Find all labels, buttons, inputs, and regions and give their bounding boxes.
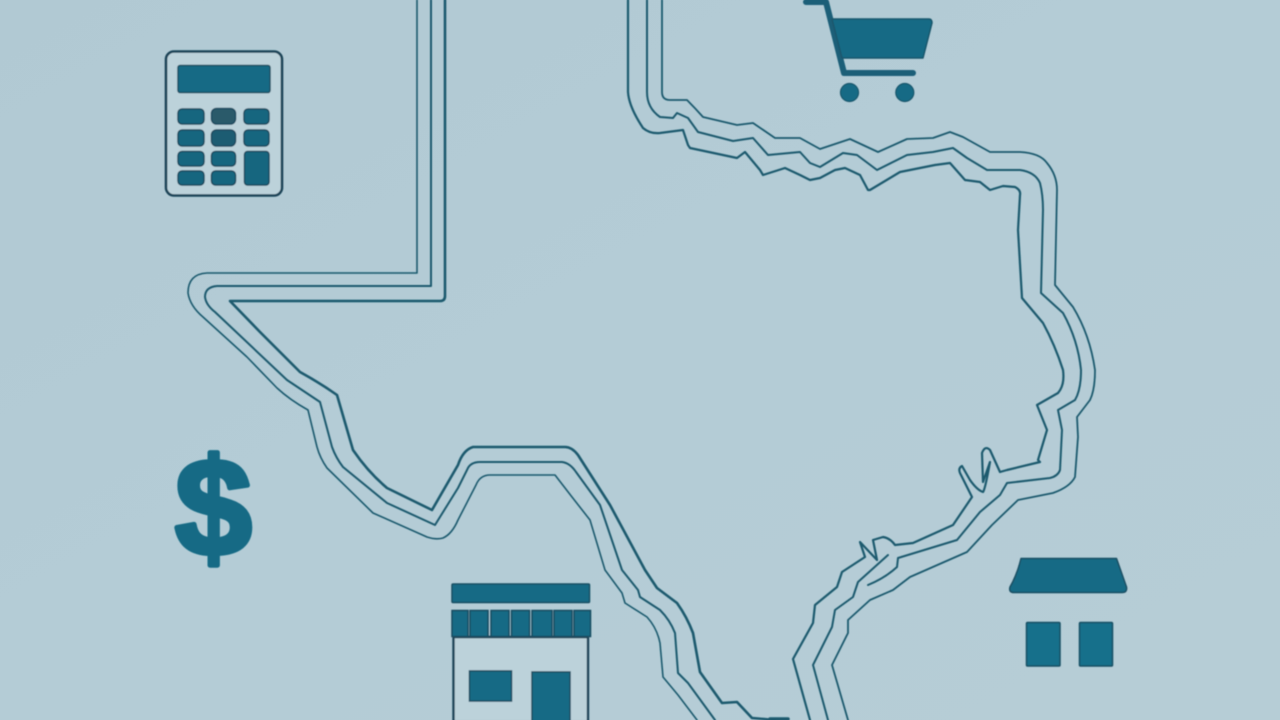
map: Texas triple outline: [188, 0, 1095, 720]
icon: storefront: [452, 584, 590, 720]
coastal blob at southern tip: [770, 717, 788, 720]
icon: house: [1010, 558, 1127, 666]
icon: dollar sign: $: [175, 431, 252, 585]
house roof: [1010, 558, 1127, 592]
house left window: [1026, 622, 1060, 666]
icon: shopping cart: [806, 2, 932, 102]
storefront door: [532, 672, 570, 720]
middle contour, west side: [205, 0, 715, 720]
storefront window: [470, 671, 512, 701]
outer contour, east side: [662, 0, 1095, 720]
icon: calculator: [166, 52, 282, 196]
storefront awning: [452, 610, 590, 636]
cart basket: [832, 19, 932, 58]
cart handle and frame: [806, 2, 913, 73]
cart wheels: [840, 84, 914, 102]
calculator keys: [178, 108, 269, 185]
house right window: [1080, 622, 1112, 666]
inner contour, east side with bayou spikes: [628, 0, 1063, 720]
storefront sign band: [452, 584, 590, 602]
inner contour, west side: [230, 0, 775, 720]
storefront wall: [454, 637, 588, 720]
calculator screen: [178, 66, 270, 92]
middle contour, east side: [647, 0, 1081, 720]
outer contour, west side: [188, 0, 697, 720]
